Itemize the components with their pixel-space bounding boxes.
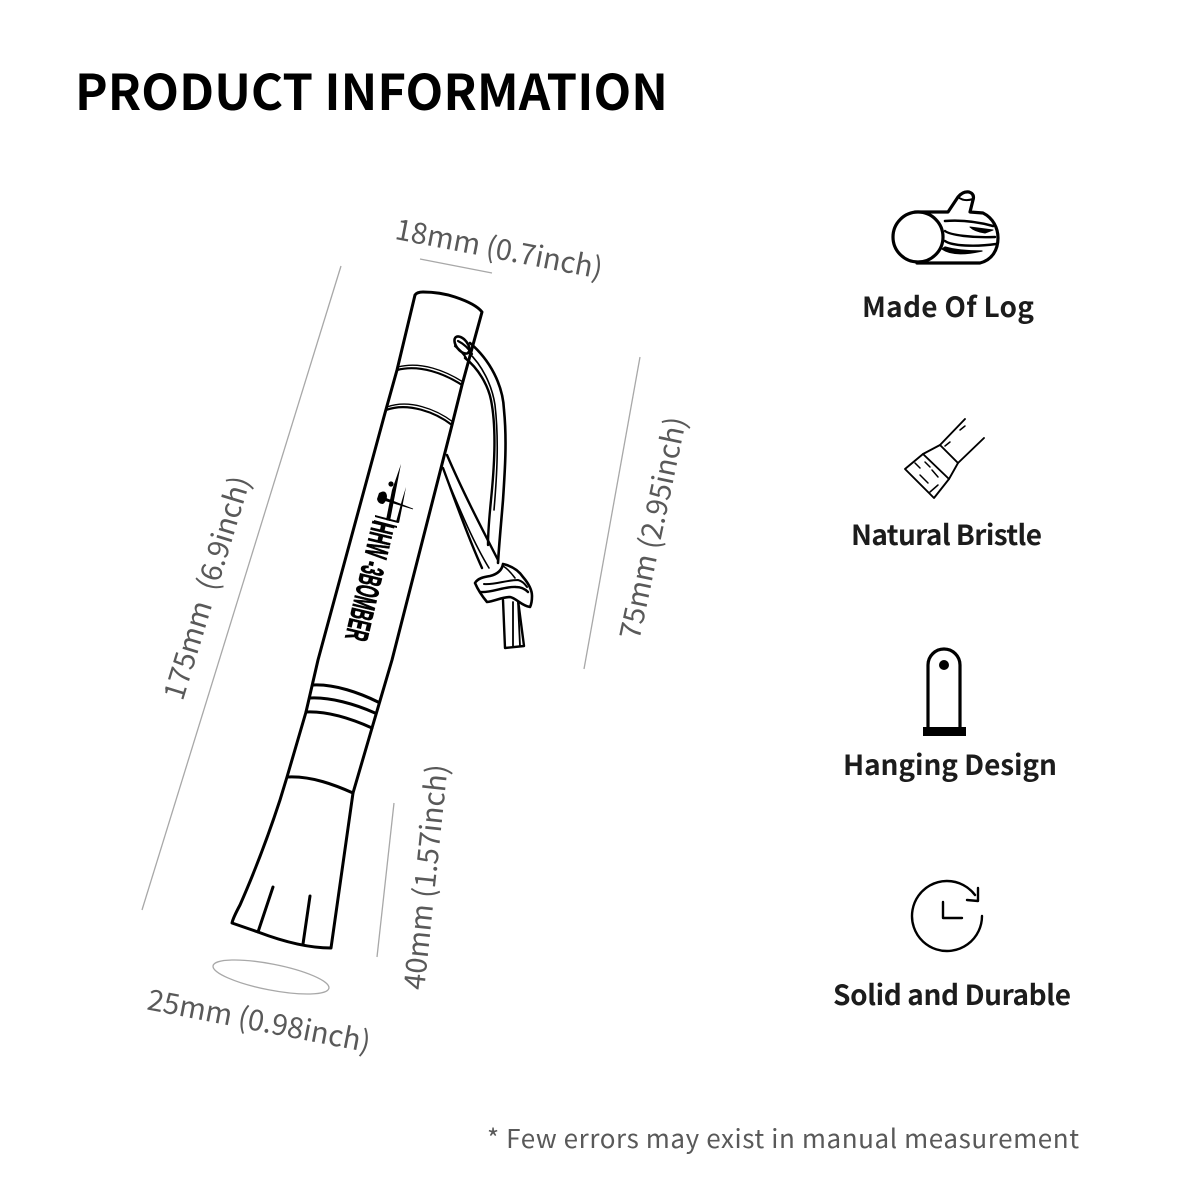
hanging hole [452,334,472,356]
feature: natural bristle [851,419,1042,554]
icon: hanging tag [923,649,966,736]
feature: hanging design [843,649,1057,784]
brush illustration: HHW -3BOMBER [338,518,401,644]
label: Solid and Durable [833,974,1071,1014]
bottom rings [288,685,378,793]
dimension: upper length [584,357,695,669]
bomber logo [374,464,413,528]
icon: clock refresh [912,881,982,951]
bristle lines [258,887,310,944]
brush outline [232,292,482,948]
icon: log [893,192,998,263]
lanyard [443,343,532,648]
brush illustration [232,292,532,948]
dimension: bristle length: 40mm (1.57inch) [391,762,457,992]
feature: made of log [862,192,1034,326]
dimension: upper length: 75mm (2.95inch) [607,412,695,643]
feature: solid and durable [833,881,1071,1014]
strap through hole [455,341,472,358]
ferrule rings [386,368,462,425]
footnote: * Few errors may exist in manual measurement [487,1119,1079,1156]
icon: brush [905,419,984,498]
dimension: head width: 18mm (0.7inch) [392,206,607,288]
dimension: brush total length [142,266,341,910]
tails [503,600,524,648]
label: Made Of Log [862,286,1034,326]
dimension: brush total length: 175mm (6.9inch) [151,470,259,704]
knot [475,564,532,607]
dimension: bristle width: 25mm (0.98inch) [144,977,375,1061]
label: Natural Bristle [851,514,1042,554]
title: PRODUCT INFORMATION [75,54,668,125]
label: Hanging Design [843,744,1057,784]
